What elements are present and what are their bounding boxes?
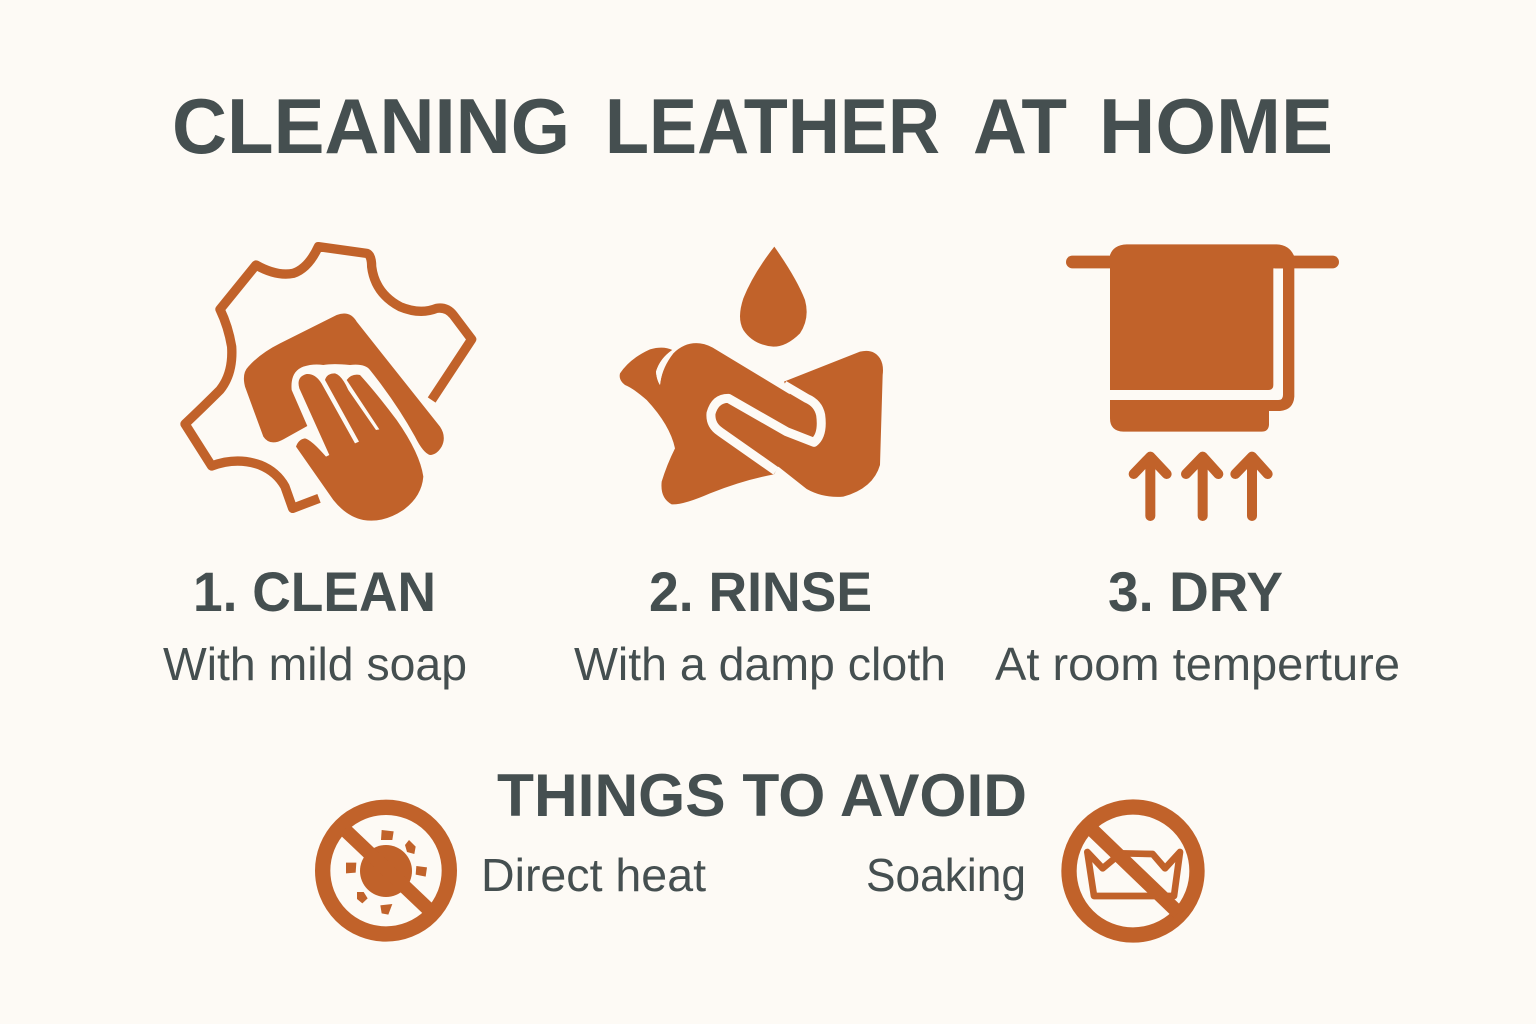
icon: no soaking [1069,807,1197,935]
text: step 2 description: With a damp cloth [574,638,946,690]
icon: water drop and damp cloth [620,247,883,504]
icon: hand wiping leather with cloth [185,247,472,521]
heading: step 1: 1. CLEAN [193,560,436,623]
title: HOME [1099,82,1333,170]
title: LEATHER [605,82,940,170]
text: soaking: Soaking [866,849,1026,901]
panel: step 2 rinse [574,247,946,690]
title: AT [973,82,1067,170]
heading: step 2: 2. RINSE [649,560,872,623]
text: step 3 description: At room temperture [995,638,1400,690]
panel: step 3 dry [995,244,1400,690]
panel: things to avoid [323,762,1197,935]
icon: towel on rail with rising air arrows [1072,244,1333,516]
panel: step 1 clean [163,247,472,690]
title [172,82,1333,170]
title: CLEANING [172,82,570,170]
text: direct heat: Direct heat [481,849,706,901]
heading: things to avoid: THINGS TO AVOID [497,762,1027,829]
text: step 1 description: With mild soap [163,638,467,690]
heading: step 3: 3. DRY [1108,560,1283,623]
icon: no direct heat [323,807,449,934]
